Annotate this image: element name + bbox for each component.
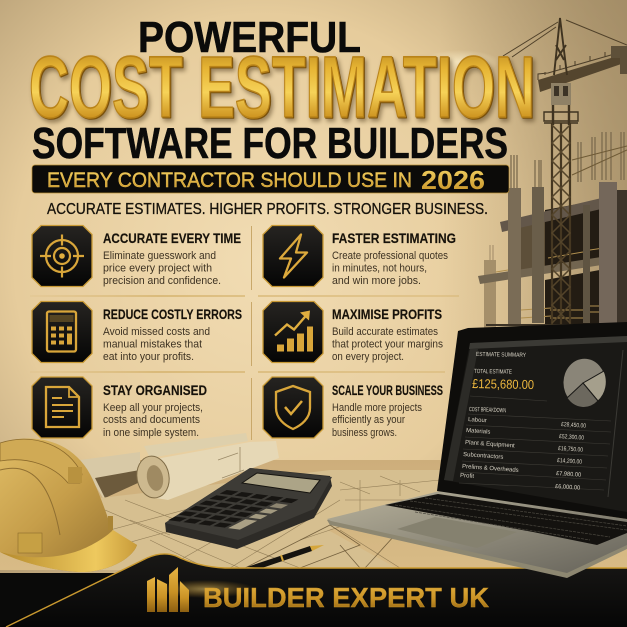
- heading: powerful: POWERFUL: [138, 14, 361, 62]
- estimate summary text: £125,680.00: [472, 376, 534, 392]
- description: Build accurate estimates: [332, 326, 438, 338]
- description: Keep all your projects,: [103, 402, 203, 414]
- description: [332, 326, 443, 363]
- description: Create professional quotes: [332, 250, 448, 262]
- description: price every project with: [103, 262, 212, 274]
- description: [103, 250, 221, 287]
- icon: shield: [263, 377, 323, 438]
- title: ACCURATE EVERY TIME: [103, 231, 241, 246]
- description: Avoid missed costs and: [103, 326, 210, 338]
- cost breakdown table: Profit: [460, 473, 475, 480]
- description: precision and confidence.: [103, 275, 221, 287]
- cost breakdown table: Materials: [466, 428, 491, 436]
- banner: every contractor: [32, 165, 509, 195]
- hard hat: [0, 438, 137, 572]
- cost breakdown table: Subcontractors: [463, 452, 504, 461]
- pen: [247, 545, 324, 568]
- description: Eliminate guesswork and: [103, 250, 216, 262]
- calculator: [165, 468, 332, 549]
- title: FASTER ESTIMATING: [332, 231, 456, 246]
- description: Handle more projects: [332, 402, 422, 414]
- cost breakdown table: £16,750.00: [558, 446, 584, 454]
- title: STAY ORGANISED: [103, 383, 207, 398]
- icon: document: [32, 377, 92, 438]
- description: [103, 326, 210, 363]
- description: [332, 250, 448, 287]
- panel: maximise profits: [263, 302, 443, 363]
- laptop: [327, 322, 627, 578]
- description: business grows.: [332, 427, 397, 439]
- description: and win more jobs.: [332, 275, 421, 287]
- estimate summary text: TOTAL ESTIMATE: [474, 369, 512, 376]
- panel: scale your business: [263, 377, 443, 439]
- description: eat into your profits.: [103, 351, 194, 363]
- icon: lightning bolt: [263, 226, 323, 286]
- laptop base: [327, 491, 627, 578]
- title: MAXIMISE PROFITS: [332, 307, 442, 322]
- tower crane: [503, 18, 627, 325]
- logo: building bars: [147, 567, 189, 612]
- cost breakdown table: £6,000.00: [555, 484, 581, 492]
- icon: target: [32, 226, 92, 286]
- panel: faster estimating: [263, 226, 456, 287]
- cost breakdown table: Plant & Equipment: [465, 440, 515, 449]
- panel: reduce costly errors: [32, 302, 242, 363]
- cost breakdown table: £7,980.00: [556, 471, 582, 479]
- title: SCALE YOUR BUSINESS: [332, 383, 443, 398]
- description: on every project.: [332, 351, 404, 363]
- desk with blueprints: [0, 452, 627, 570]
- icon: rising chart: [263, 302, 323, 362]
- dividers: [30, 226, 459, 440]
- estimate summary text: COST BREAKDOWN: [469, 407, 506, 414]
- title: REDUCE COSTLY ERRORS: [103, 307, 242, 322]
- description: [103, 402, 203, 439]
- description: that protect your margins: [332, 338, 443, 350]
- footer brand name: BUILDER EXPERT UK: [203, 582, 489, 613]
- laptop screen: [437, 322, 627, 519]
- cost breakdown table: £52,300.00: [559, 434, 585, 442]
- cost breakdown table: [460, 417, 587, 492]
- cost breakdown table: Prelims & Overheads: [462, 464, 519, 474]
- cost breakdown table: Labour: [468, 417, 487, 424]
- panel: accurate every time: [32, 226, 241, 287]
- description: costs and documents: [103, 414, 200, 426]
- description: in one simple system.: [103, 427, 199, 439]
- description: [332, 402, 422, 439]
- building under construction: [478, 132, 627, 328]
- pie chart: [564, 359, 606, 407]
- heading: software for builders: SOFTWARE FOR BUILDERS: [32, 120, 508, 168]
- icon: calculator: [32, 302, 92, 362]
- estimate summary text: ESTIMATE SUMMARY: [476, 352, 526, 359]
- description: in minutes, not hours,: [332, 262, 427, 274]
- description: manual mistakes that: [103, 338, 203, 350]
- cost breakdown table: £14,200.00: [557, 458, 583, 466]
- banner: every contractor: EVERY CONTRACTOR SHOULD USE IN: [47, 168, 412, 192]
- blueprint rolls: [134, 433, 279, 500]
- description: efficiently as your: [332, 414, 405, 426]
- footer band: [0, 554, 627, 627]
- banner: every contractor: 2026: [421, 165, 485, 195]
- cost breakdown table: £28,450.00: [561, 422, 587, 430]
- estimate summary text: [469, 352, 534, 414]
- tagline: ACCURATE ESTIMATES. HIGHER PROFITS. STRONGER BUSINESS.: [47, 201, 488, 218]
- panel: stay organised: [32, 377, 207, 439]
